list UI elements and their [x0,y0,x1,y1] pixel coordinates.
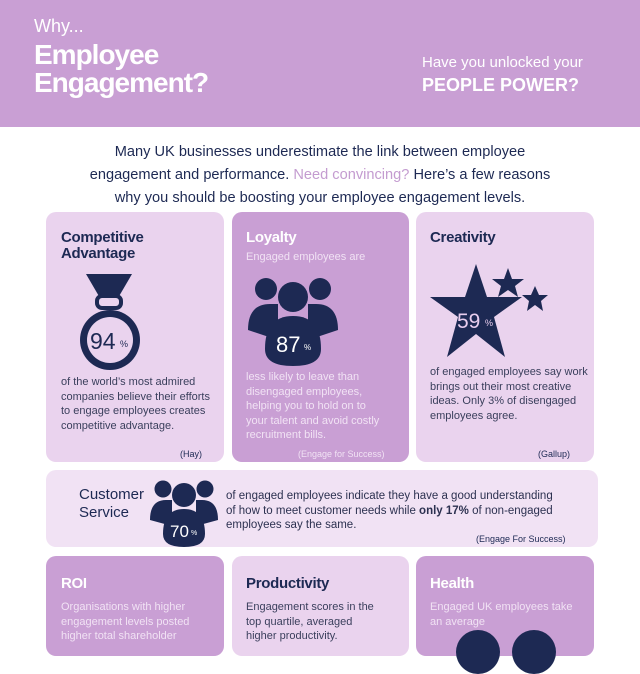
icon: stars 59% [430,264,548,357]
header banner [0,0,640,127]
title: Employee [34,39,158,70]
panel: creativity: Creativity [430,229,495,246]
panel: competitive advantage: (Hay) [180,449,202,459]
panel: health [416,556,594,656]
panel: loyalty [232,212,409,462]
icon: medal 94%: 94 [90,328,116,354]
panel: creativity: (Gallup) [538,449,570,459]
icon: people group 87%: 87 [276,332,300,357]
panel: customer service: of engaged employees indicate they have a good understanding of how to meet customer needs while only 17% of non-engaged employees say the same. [226,490,553,531]
panel: ROI: Organisations with higher engagement levels posted higher total shareholder [61,601,189,642]
panel: customer service: Service [79,504,129,521]
icon: people group 87% [248,278,338,366]
title: Engagement? [34,67,208,98]
panel: customer service: Customer [79,486,144,503]
panel: productivity [232,556,409,656]
tagline: PEOPLE POWER? [422,75,579,95]
panel: loyalty: (Engage for Success) [298,449,385,459]
tagline [422,54,583,95]
icon: people group 70%: 70 [170,522,189,541]
panel: health: Health [430,575,474,592]
title [34,16,208,98]
intro text: why you should be boosting your employee engagement levels. [115,190,525,206]
panel: productivity: Productivity [246,575,329,592]
intro text: Many UK businesses underestimate the link between employee [115,144,525,160]
icon: circles [456,630,556,674]
icon: people group 70%: % [191,530,197,537]
panel: competitive advantage [46,212,224,462]
intro text: engagement and performance. Need convincing? Here’s a few reasons [90,167,550,183]
panel: competitive advantage: Competitive [61,229,144,246]
panel: health: Engaged UK employees take an average [430,601,572,628]
panel: customer service [46,470,598,547]
icon: people group 87%: % [304,343,311,352]
title: Why... [34,16,84,36]
panel: competitive advantage: of the world’s most admired companies believe their efforts to engage employees creates competitive advantage. [61,376,210,432]
icon: medal 94%: % [120,339,128,349]
panel: ROI: ROI [61,575,87,592]
panel: loyalty: Loyalty [246,229,296,246]
icon: stars 59%: % [485,318,493,328]
icon: medal 94% [80,274,140,370]
panel: creativity: of engaged employees say work brings out their most creative ideas. Only 3% of disengaged employees agree. [430,366,588,422]
panel: competitive advantage: Advantage [61,245,135,262]
intro text [90,144,550,206]
panel: ROI [46,556,224,656]
icon: people group 70% [150,480,218,547]
panel: productivity: Engagement scores in the top quartile, averaged higher productivity. [246,601,374,642]
panel: customer service: (Engage For Success) [476,534,566,544]
tagline: Have you unlocked your [422,54,583,71]
panel: creativity [416,212,594,462]
panel: loyalty: Engaged employees are [246,251,365,263]
panel: loyalty: less likely to leave than disengaged employees, helping you to hold on to your talent and avoid costly recruitment bills. [246,371,379,441]
icon: stars 59%: 59 [457,310,480,333]
